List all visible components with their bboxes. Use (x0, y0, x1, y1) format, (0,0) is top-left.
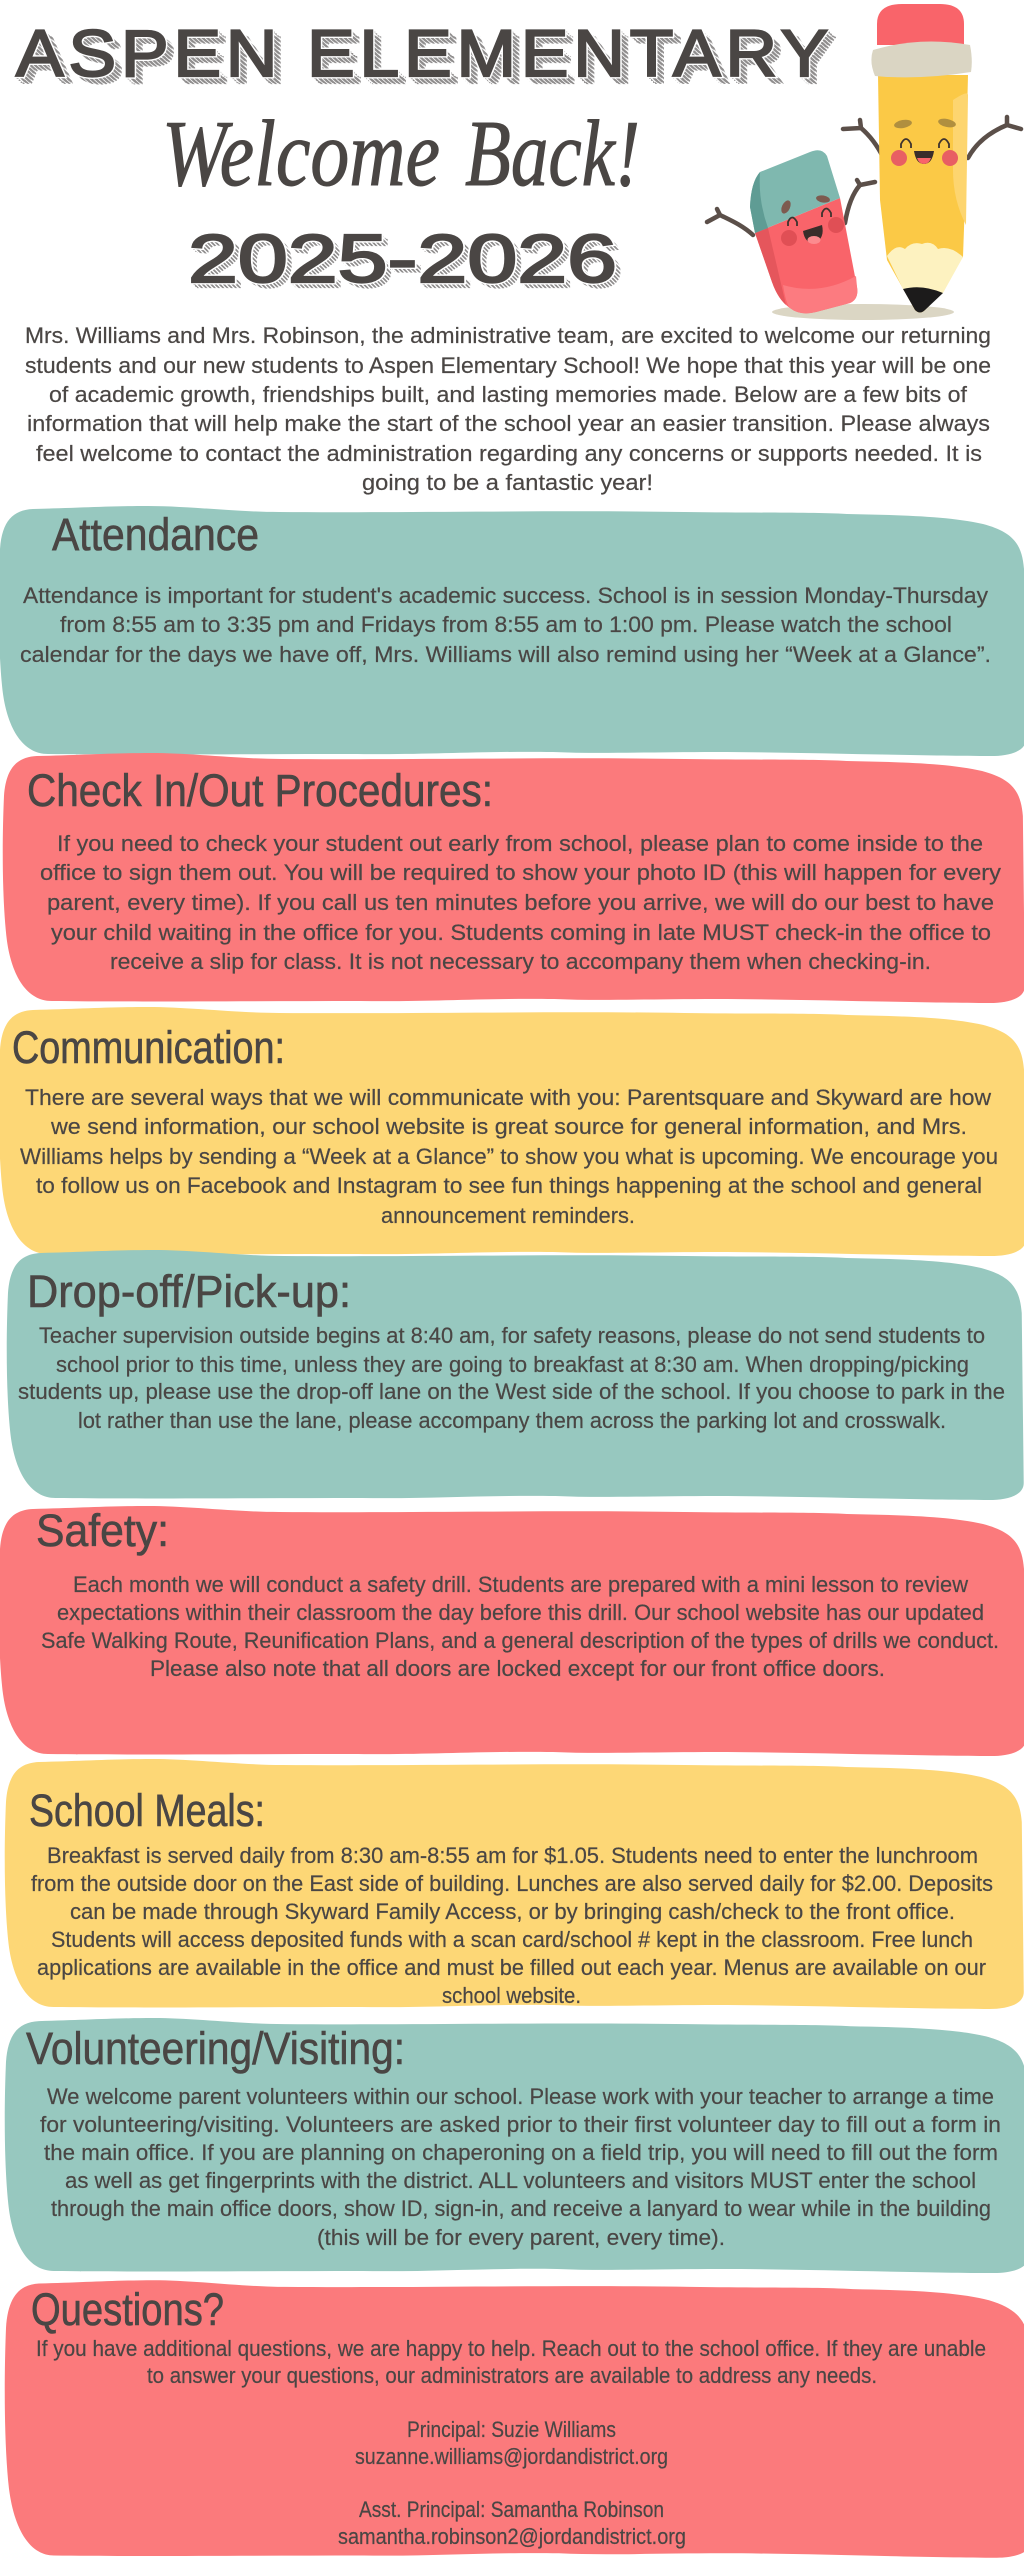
text: volunteering body: for volunteering/visiting. Volunteers are asked prior to their first volunteer day to fill out a form in (40, 2112, 1001, 2137)
text: volunteering body: through the main office doors, show ID, sign-in, and receive a lanyard to wear while in the building (51, 2196, 991, 2221)
text: safety body: Please also note that all doors are locked except for our front office doors. (150, 1656, 885, 1681)
text: principal contact (355, 2417, 668, 2469)
text: school meals body: can be made through Skyward Family Access, or by bringing cash/check to the front office. (70, 1899, 955, 1924)
title: Aspen Elementary: ASPEN ELEMENTARY (16, 16, 828, 90)
panel: drop-off/pick-up (7, 1250, 1024, 1500)
subtitle: Welcome Back!: Welcome (162, 102, 440, 206)
text block: introduction (25, 323, 991, 495)
text block: introduction: information that will help make the start of the school year an easier transition. Please always (27, 411, 990, 436)
text: principal contact: Principal: Suzie Williams (407, 2417, 616, 2442)
text: school meals body (31, 1843, 993, 2008)
text block: introduction: Mrs. Williams and Mrs. Robinson, the administrative team, are excited to welcome our returning (25, 323, 991, 348)
text: attendance body: calendar for the days we have off, Mrs. Williams will also remind using her “Week at a Glance”. (20, 642, 991, 667)
text: volunteering body: as well as get fingerprints with the district. ALL volunteers and visitors MUST enter the school (65, 2168, 976, 2193)
text: check in/out body: office to sign them out. You will be required to show your photo ID (this will happen for every (40, 860, 1001, 885)
text: questions body: If you have additional questions, we are happy to help. Reach out to the school office. If they are unable (36, 2336, 986, 2361)
text: volunteering body: (this will be for every parent, every time). (317, 2225, 725, 2250)
title: Aspen Elementary: ASPEN ELEMENTARY (18, 18, 830, 92)
heading: volunteering/visiting: Volunteering/Visiting: (26, 2023, 405, 2074)
text: drop-off body: students up, please use the drop-off lane on the West side of the school. If you choose to park in the (18, 1379, 1005, 1404)
text: attendance body: from 8:55 am to 3:35 pm and Fridays from 8:55 am to 1:00 pm. Please watch the school (60, 612, 952, 637)
panel: safety (0, 1505, 1024, 1756)
text: assistant principal contact: Asst. Principal: Samantha Robinson (359, 2497, 664, 2522)
text: communication body: to follow us on Facebook and Instagram to see fun things happening at the school and general (36, 1173, 982, 1198)
text block: introduction: of academic growth, friendships built, and lasting memories made. Below are a few bits of (49, 382, 968, 407)
text: school meals body: Breakfast is served daily from 8:30 am-8:55 am for $1.05. Students need to enter the lunchroom (47, 1843, 978, 1868)
icon: pencil character (843, 4, 1021, 313)
text: volunteering body: the main office. If you are planning on chaperoning on a field trip, you will need to fill out the form (44, 2140, 998, 2165)
text: attendance body: Attendance is important for student's academic success. School is in session Monday-Thursday (23, 583, 988, 608)
text: safety body: expectations within their classroom the day before this drill. Our school website has our updated (57, 1600, 984, 1625)
text: questions body (36, 2336, 986, 2388)
text: volunteering body (40, 2084, 1001, 2250)
heading: school meals: School Meals: (29, 1785, 265, 1836)
text: check in/out body: your child waiting in the office for you. Students coming in late MUST check-in the office to (51, 920, 991, 945)
text: check in/out body: If you need to check your student out early from school, please plan to come inside to the (57, 831, 983, 856)
text: attendance body (20, 583, 991, 667)
text: drop-off body (18, 1323, 1005, 1433)
text: communication body: Williams helps by sending a “Week at a Glance” to show you what is upcoming. We encourage you (20, 1144, 998, 1169)
heading: communication: Communication: (12, 1022, 285, 1073)
text: check in/out body: receive a slip for class. It is not necessary to accompany them when checking-in. (110, 949, 931, 974)
text: assistant principal contact: samantha.robinson2@jordandistrict.org (338, 2524, 686, 2549)
panel: check in/out procedures (3, 753, 1024, 1003)
text: check in/out body (40, 831, 1001, 974)
icon: pencil and eraser characters (707, 4, 1021, 320)
panel: volunteering/visiting (5, 2018, 1024, 2273)
panel: school meals (5, 1759, 1024, 2009)
heading: check in/out: Check In/Out Procedures: (27, 765, 493, 816)
school year: 2025-2026 (188, 221, 617, 297)
text: safety body: Each month we will conduct a safety drill. Students are prepared with a mini lesson to review (73, 1572, 968, 1597)
text block: introduction: feel welcome to contact the administration regarding any concerns or supports needed. It is (36, 441, 982, 466)
panel: attendance (0, 506, 1024, 756)
title: Aspen Elementary: ASPEN ELEMENTARY (24, 23, 836, 97)
title: Aspen Elementary: ASPEN ELEMENTARY (22, 22, 834, 96)
panel: questions (5, 2280, 1024, 2558)
text block: introduction: going to be a fantastic year! (362, 470, 653, 495)
heading: drop-off/pick-up: Drop-off/Pick-up: (27, 1266, 351, 1317)
text: school meals body: Students will access deposited funds with a scan card/school # kept in the classroom. Free lunch (51, 1927, 973, 1952)
text: drop-off body: school prior to this time, unless they are going to breakfast at 8:30 am. When dropping/picking (56, 1352, 969, 1377)
title: Aspen Elementary: ASPEN ELEMENTARY (20, 20, 832, 94)
title: Aspen Elementary: ASPEN ELEMENTARY (16, 16, 828, 90)
text: school meals body: applications are available in the office and must be filled out each year. Menus are available on our (37, 1955, 986, 1980)
school year: 2025-2026 (188, 221, 617, 297)
school year: 2025-2026 (192, 225, 621, 301)
text: school meals body: school website. (442, 1983, 581, 2008)
text: principal contact: suzanne.williams@jordandistrict.org (355, 2444, 668, 2469)
subtitle: Welcome Back!: Back! (465, 102, 640, 206)
heading: safety: Safety: (36, 1505, 169, 1556)
heading: questions: Questions? (31, 2284, 224, 2335)
text: questions body: to answer your questions, our administrators are available to address any needs. (147, 2363, 877, 2388)
text: check in/out body: parent, every time). If you call us ten minutes before you arrive, we will do our best to have (47, 890, 994, 915)
text: drop-off body: lot rather than use the lane, please accompany them across the parking lot and crosswalk. (78, 1408, 946, 1433)
text: communication body: we send information, our school website is great source for general information, and Mrs. (50, 1114, 967, 1139)
school year: 2025-2026 (190, 223, 619, 299)
school year: 2025-2026 (194, 226, 623, 302)
text: assistant principal contact (338, 2497, 686, 2549)
text: drop-off body: Teacher supervision outside begins at 8:40 am, for safety reasons, please do not send students to (39, 1323, 985, 1348)
heading: attendance: Attendance (52, 509, 259, 560)
text: safety body (41, 1572, 999, 1681)
panel: communication (0, 1007, 1024, 1256)
icon: eraser character (707, 150, 875, 313)
text: communication body: announcement reminders. (381, 1203, 635, 1228)
text: communication body: There are several ways that we will communicate with you: Parentsquare and Skyward are how (25, 1085, 991, 1110)
text: safety body: Safe Walking Route, Reunification Plans, and a general description of the types of drills we conduct. (41, 1628, 999, 1653)
text block: introduction: students and our new students to Aspen Elementary School! We hope that this year will be one (25, 353, 991, 378)
text: communication body (20, 1085, 998, 1228)
text: school meals body: from the outside door on the East side of building. Lunches are also served daily for $2.00. Deposits (31, 1871, 993, 1896)
text: volunteering body: We welcome parent volunteers within our school. Please work with your teacher to arrange a time (47, 2084, 994, 2109)
